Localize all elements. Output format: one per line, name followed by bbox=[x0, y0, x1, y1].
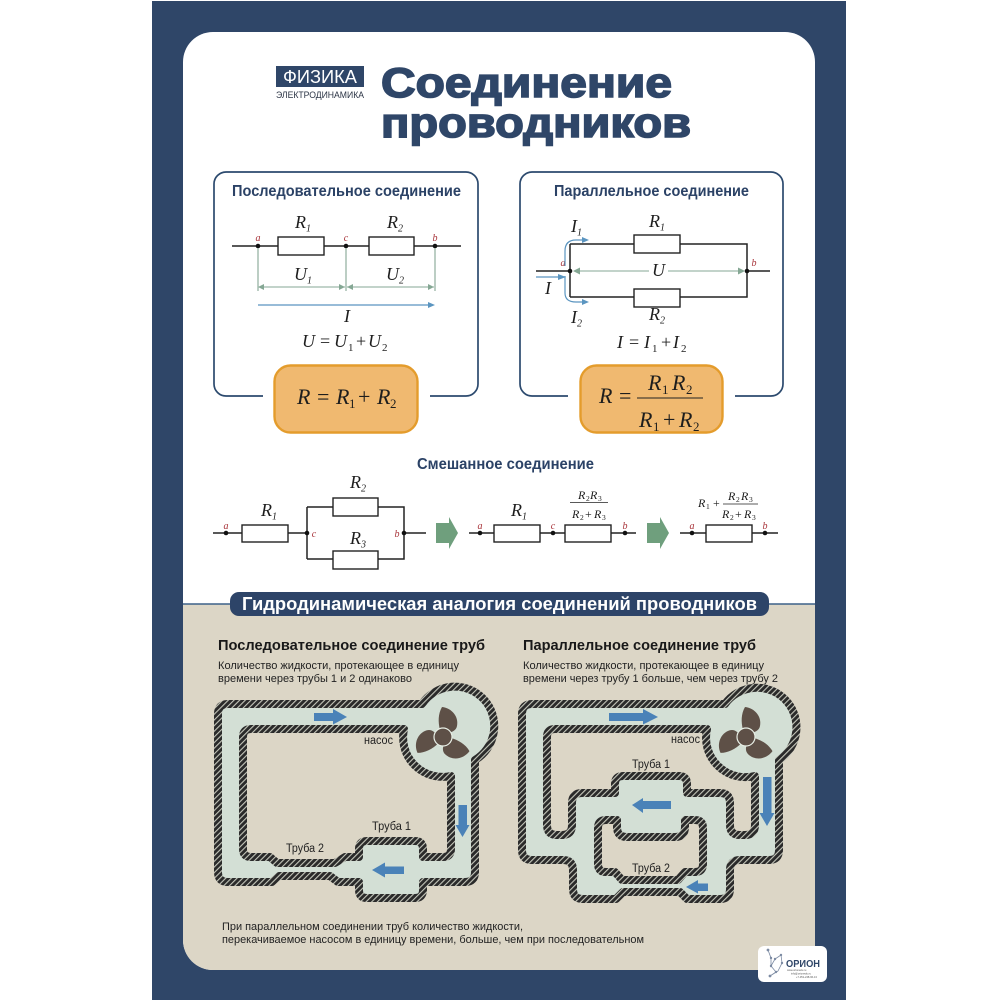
diagram: series pipes bbox=[218, 687, 494, 898]
mixed circuit 2 bbox=[469, 488, 636, 542]
text block: parallel pipes: Количество жидкости, протекающее в единицу bbox=[523, 660, 764, 672]
resistance formula box: + bbox=[358, 384, 370, 409]
text block: parallel pipes: Параллельное соединение труб bbox=[523, 637, 756, 654]
resistance formula box: R bbox=[671, 370, 686, 395]
current formula: + bbox=[661, 332, 671, 352]
resistance formula box: 2 bbox=[693, 419, 700, 434]
conclusion text: перекачиваемое насосом в единицу времени, больше, чем при последовательном bbox=[222, 934, 644, 946]
flow arrows bbox=[609, 709, 774, 894]
logo: Orion: ОРИОН bbox=[786, 959, 820, 970]
title bbox=[381, 59, 691, 146]
current formula: I bbox=[616, 332, 624, 352]
series circuit: 1 bbox=[306, 224, 311, 234]
pipe labels: Труба 1 bbox=[632, 759, 670, 771]
equivalent resistance fraction: 2 bbox=[580, 513, 584, 522]
mixed circuit 3: b bbox=[762, 521, 768, 532]
logo: Orion bbox=[758, 946, 827, 982]
pipe labels: Труба 2 bbox=[286, 843, 324, 855]
resistance formula box: + bbox=[663, 407, 675, 432]
mixed circuit 1: 1 bbox=[272, 512, 277, 522]
mixed circuit 1: 2 bbox=[361, 484, 366, 494]
text block: series pipes: времени через трубы 1 и 2 одинаково bbox=[218, 673, 412, 685]
logo: Orion: www.orionedu.ru bbox=[787, 968, 807, 972]
series circuit: a bbox=[256, 233, 260, 244]
total resistance formula: + bbox=[713, 496, 720, 510]
total resistance formula: 2 bbox=[736, 495, 740, 504]
total resistance formula: 3 bbox=[749, 495, 753, 504]
resistance formula box bbox=[580, 366, 722, 434]
resistance formula box: R bbox=[335, 384, 350, 409]
resistance formula box: R bbox=[678, 407, 693, 432]
voltage dimension arrows: 2 bbox=[399, 276, 404, 286]
pipe walls bbox=[522, 688, 796, 899]
voltage formula: 2 bbox=[382, 342, 388, 354]
current arrow: I bbox=[343, 306, 351, 326]
current arrow bbox=[258, 302, 435, 326]
heading: Последовательное соединение bbox=[232, 183, 461, 200]
panel frame bbox=[214, 172, 478, 396]
pipe labels bbox=[286, 735, 411, 855]
title: проводников bbox=[381, 99, 691, 146]
resistance formula box: 2 bbox=[390, 396, 396, 411]
text block: series pipes bbox=[218, 637, 485, 685]
mixed circuit 2: c bbox=[551, 521, 556, 532]
parallel circuit: a bbox=[560, 258, 566, 269]
resistance formula box: R bbox=[376, 384, 391, 409]
series circuit bbox=[232, 212, 461, 255]
mixed circuit 2: R bbox=[511, 500, 522, 520]
equivalent resistance fraction: R bbox=[589, 488, 598, 502]
text block: parallel pipes bbox=[523, 637, 778, 685]
voltage arrow bbox=[573, 260, 745, 280]
total resistance formula: R bbox=[727, 489, 736, 503]
mixed circuit 2: a bbox=[478, 521, 482, 532]
parallel circuit: 2 bbox=[660, 316, 665, 326]
total resistance formula: + bbox=[735, 507, 742, 521]
total resistance formula: R bbox=[721, 507, 730, 521]
text block: parallel pipes: времени через трубу 1 больше, чем через трубу 2 bbox=[523, 673, 778, 685]
current formula: = bbox=[629, 332, 639, 352]
resistance formula box: = bbox=[317, 384, 329, 409]
panel: series connection bbox=[214, 172, 478, 432]
current arrows: I bbox=[571, 216, 577, 236]
voltage dimension arrows: U bbox=[294, 264, 307, 284]
voltage formula: U bbox=[368, 331, 382, 351]
current arrows: 1 bbox=[577, 228, 582, 238]
resistance formula box: R bbox=[638, 407, 653, 432]
poster background bbox=[152, 1, 846, 1000]
pipe labels: Труба 2 bbox=[632, 863, 670, 875]
parallel circuit: b bbox=[752, 258, 756, 269]
series circuit: b bbox=[432, 233, 438, 244]
conclusion text bbox=[222, 921, 644, 946]
mixed circuit 2: 1 bbox=[522, 512, 527, 522]
mixed circuit 1: b bbox=[394, 529, 400, 540]
mixed connection heading: Смешанное соединение bbox=[417, 456, 594, 473]
flow arrows bbox=[314, 709, 470, 878]
total resistance formula bbox=[697, 489, 758, 522]
current arrows: I bbox=[544, 278, 552, 298]
text block: series pipes: Последовательное соединение труб bbox=[218, 637, 485, 654]
voltage formula: U bbox=[334, 331, 348, 351]
icon: pump fan bbox=[410, 707, 471, 764]
parallel circuit: R bbox=[649, 304, 660, 324]
current formula: I bbox=[643, 332, 651, 352]
current formula: I bbox=[672, 332, 680, 352]
pipe labels bbox=[632, 734, 700, 875]
current arrows: 2 bbox=[577, 318, 582, 330]
current arrows bbox=[536, 216, 589, 330]
voltage formula: U bbox=[302, 331, 316, 351]
resistance formula box: 1 bbox=[653, 419, 660, 434]
series circuit: 2 bbox=[398, 224, 403, 234]
equivalent resistance fraction: 3 bbox=[602, 513, 606, 522]
mixed circuit 1: a bbox=[224, 521, 228, 532]
title: Соединение bbox=[381, 59, 672, 106]
banner: hydrodynamic analogy bbox=[183, 592, 815, 616]
equivalent resistance fraction: 3 bbox=[598, 494, 602, 503]
equivalent resistance fraction: 2 bbox=[586, 494, 590, 503]
parallel circuit: 1 bbox=[660, 222, 665, 234]
mixed circuit 1: c bbox=[312, 529, 317, 540]
pipe labels: насос bbox=[671, 734, 700, 746]
resistance formula box bbox=[274, 366, 418, 432]
current arrows: I bbox=[571, 307, 577, 327]
resistance formula box: R bbox=[296, 384, 311, 409]
mixed circuit 1: R bbox=[261, 500, 272, 520]
total resistance formula: 1 bbox=[706, 502, 710, 511]
voltage formula: 1 bbox=[348, 342, 354, 354]
heading: Параллельное соединение bbox=[554, 183, 749, 200]
logo: Orion: info@orionedu.ru bbox=[791, 972, 811, 976]
resistance formula box: 1 bbox=[349, 396, 356, 411]
pipe walls bbox=[218, 687, 494, 898]
voltage formula: = bbox=[320, 331, 330, 351]
parallel circuit bbox=[536, 211, 770, 326]
beige analogy section bbox=[183, 604, 815, 970]
equivalent resistance fraction: R bbox=[577, 488, 586, 502]
equivalent resistance fraction: + bbox=[585, 507, 592, 521]
subject badge: ЭЛЕКТРОДИНАМИКА bbox=[276, 90, 365, 100]
total resistance formula: R bbox=[740, 489, 749, 503]
current formula: 1 bbox=[652, 343, 658, 355]
arrow: simplification step 2 bbox=[647, 517, 669, 549]
total resistance formula: R bbox=[743, 507, 752, 521]
banner: hydrodynamic analogy: Гидродинамическая аналогия соединений проводников bbox=[242, 594, 757, 614]
series circuit: R bbox=[387, 212, 398, 232]
mixed circuit 1 bbox=[213, 472, 426, 569]
panel: parallel connection bbox=[520, 172, 783, 434]
icon: pump fan bbox=[713, 707, 774, 764]
equivalent resistance fraction: R bbox=[593, 507, 602, 521]
equivalent resistance fraction bbox=[570, 488, 608, 522]
series circuit: R bbox=[295, 212, 306, 232]
voltage formula: + bbox=[356, 331, 366, 351]
pipe labels: Труба 1 bbox=[372, 821, 411, 833]
resistance formula box: R bbox=[647, 370, 662, 395]
resistance formula box: R bbox=[598, 383, 613, 408]
parallel circuit: R bbox=[649, 211, 660, 231]
resistance formula box: 1 bbox=[662, 382, 668, 397]
pipe labels: насос bbox=[364, 735, 393, 747]
total resistance formula: R bbox=[697, 496, 706, 510]
mixed circuit 2: b bbox=[622, 521, 628, 532]
mixed circuit 1: R bbox=[350, 472, 361, 492]
current formula: 2 bbox=[681, 343, 686, 355]
diagram: parallel pipes bbox=[522, 688, 796, 899]
total resistance formula: 3 bbox=[752, 513, 756, 522]
conclusion text: При параллельном соединении труб количество жидкости, bbox=[222, 921, 523, 933]
mixed circuit 1: R bbox=[350, 528, 361, 548]
mixed circuit 3 bbox=[680, 489, 778, 542]
voltage arrow: U bbox=[652, 260, 666, 280]
white content panel bbox=[183, 32, 815, 970]
subject badge: ФИЗИКА bbox=[283, 67, 357, 87]
mixed circuit 3: a bbox=[690, 521, 694, 532]
voltage dimension arrows: 1 bbox=[307, 276, 312, 286]
series circuit: c bbox=[344, 233, 349, 244]
subject badge bbox=[276, 66, 365, 100]
mixed circuit 1: 3 bbox=[360, 540, 366, 550]
resistance formula box: 2 bbox=[686, 382, 692, 397]
total resistance formula: 2 bbox=[730, 513, 734, 522]
text block: series pipes: Количество жидкости, протекающее в единицу bbox=[218, 660, 459, 672]
resistance formula box: = bbox=[619, 383, 631, 408]
voltage dimension arrows bbox=[258, 248, 435, 291]
equivalent resistance fraction: R bbox=[571, 507, 580, 521]
voltage dimension arrows: U bbox=[386, 264, 399, 284]
arrow: simplification step 1 bbox=[436, 517, 458, 549]
logo: Orion: +7-351-248-66-13 bbox=[796, 975, 817, 979]
panel frame bbox=[520, 172, 783, 396]
